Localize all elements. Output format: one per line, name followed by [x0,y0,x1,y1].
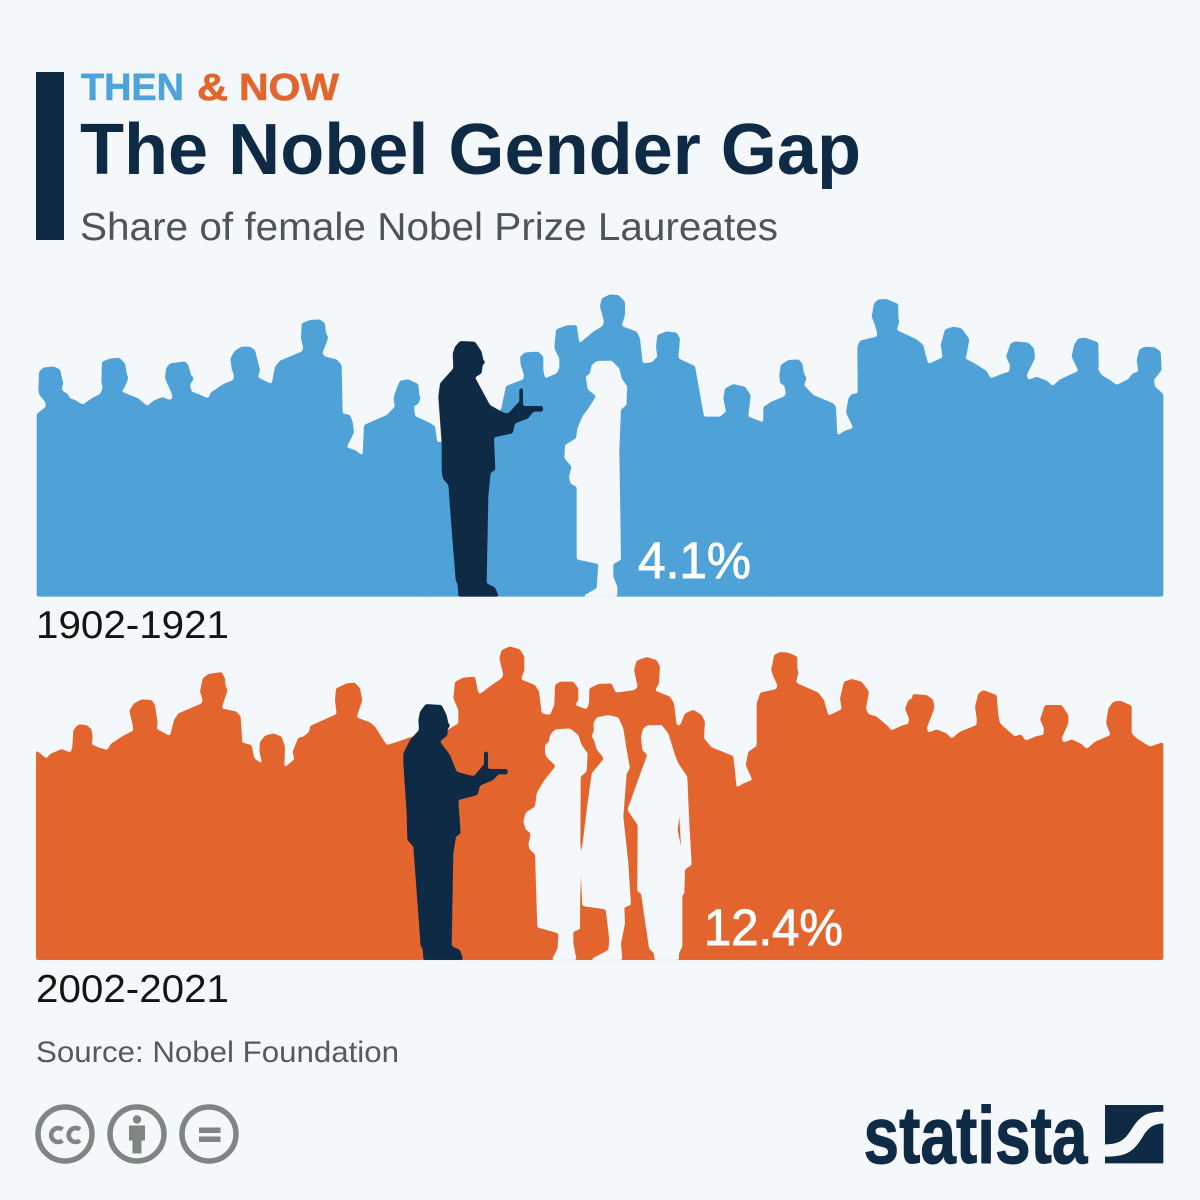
logo mark [1105,1105,1163,1163]
crowd silhouette: orange [36,646,1163,960]
panel: 1902-1921 [36,294,1163,647]
kicker: then & now: NOW [239,67,339,109]
source note: Source: Nobel Foundation [36,1036,399,1069]
female laureate silhouette [564,361,627,597]
icon: attribution [110,1107,164,1161]
panel: 2002-2021 [36,646,1163,1011]
value: 4.1%: 4.1% [638,532,751,589]
statista logo [864,1091,1163,1181]
crowd silhouette: blue [37,294,1163,597]
accent bar [36,72,64,240]
subtitle: Share of female Nobel Prize Laureates [80,206,778,249]
header block [36,67,861,249]
icon: no derivatives [182,1107,236,1161]
value: 12.4%: 12.4% [704,899,843,956]
title: The Nobel Gender Gap [80,110,861,190]
female laureate silhouettes [523,715,692,960]
kicker: then & now: & [197,67,228,109]
period label: 1902-1921 [36,604,229,647]
icon: creative commons [38,1107,92,1161]
period label: 2002-2021 [36,968,229,1011]
kicker: then & now: THEN [81,67,184,109]
male presenter silhouette [403,704,508,960]
licence icons [38,1107,236,1161]
kicker: then & now [81,67,339,109]
logo wordmark: statista [864,1091,1088,1181]
male presenter silhouette [438,341,543,597]
